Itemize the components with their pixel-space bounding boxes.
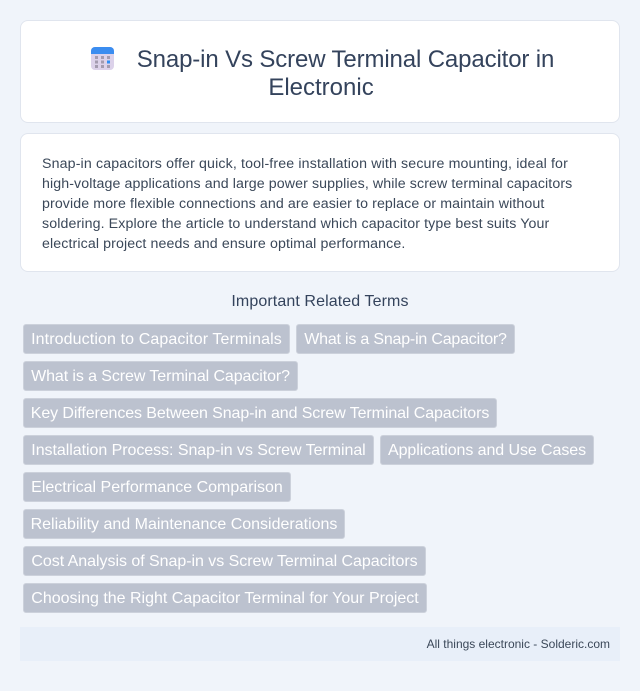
title: Snap-in Vs Screw Terminal Capacitor in xyxy=(137,46,554,73)
tag: Choosing the Right Capacitor Terminal for Your Project xyxy=(31,590,419,607)
tag xyxy=(23,583,427,613)
title xyxy=(137,46,554,101)
tag: Reliability and Maintenance Considerations xyxy=(31,516,337,533)
intro text xyxy=(42,156,572,252)
tag: Applications and Use Cases xyxy=(388,442,586,459)
tag: Introduction to Capacitor Terminals xyxy=(31,331,282,348)
tag: Key Differences Between Snap-in and Screw Terminal Capacitors xyxy=(31,405,489,422)
intro text: Snap-in capacitors offer quick, tool-free installation with secure mounting, ideal for xyxy=(42,156,568,172)
icon: calendar xyxy=(91,47,114,70)
tag xyxy=(380,435,594,465)
title: Electronic xyxy=(268,74,374,101)
intro text panel xyxy=(20,133,620,272)
tag xyxy=(23,361,298,391)
header panel xyxy=(20,20,620,123)
tag xyxy=(23,435,374,465)
intro text: electrical project needs and ensure optimal performance. xyxy=(42,236,405,252)
intro text: high-voltage applications and large power supplies, while screw terminal capacitors xyxy=(42,176,572,192)
tag: What is a Snap-in Capacitor? xyxy=(304,331,507,348)
related term tags xyxy=(23,324,594,613)
tag: Cost Analysis of Snap-in vs Screw Terminal Capacitors xyxy=(31,553,418,570)
tag xyxy=(23,546,426,576)
tag xyxy=(23,472,291,502)
tag xyxy=(23,509,345,539)
intro text: soldering. Explore the article to understand which capacitor type best suits Your xyxy=(42,216,549,232)
tag xyxy=(23,398,497,428)
intro text: provide more flexible connections and are easier to replace or maintain without xyxy=(42,196,544,212)
footer xyxy=(20,627,620,661)
related terms heading: Important Related Terms xyxy=(231,293,409,310)
tag: Installation Process: Snap-in vs Screw Terminal xyxy=(31,442,366,459)
tag: What is a Screw Terminal Capacitor? xyxy=(31,368,290,385)
tag xyxy=(23,324,290,354)
footer credit: All things electronic - Solderic.com xyxy=(427,637,610,651)
tag: Electrical Performance Comparison xyxy=(31,479,283,496)
tag xyxy=(296,324,515,354)
